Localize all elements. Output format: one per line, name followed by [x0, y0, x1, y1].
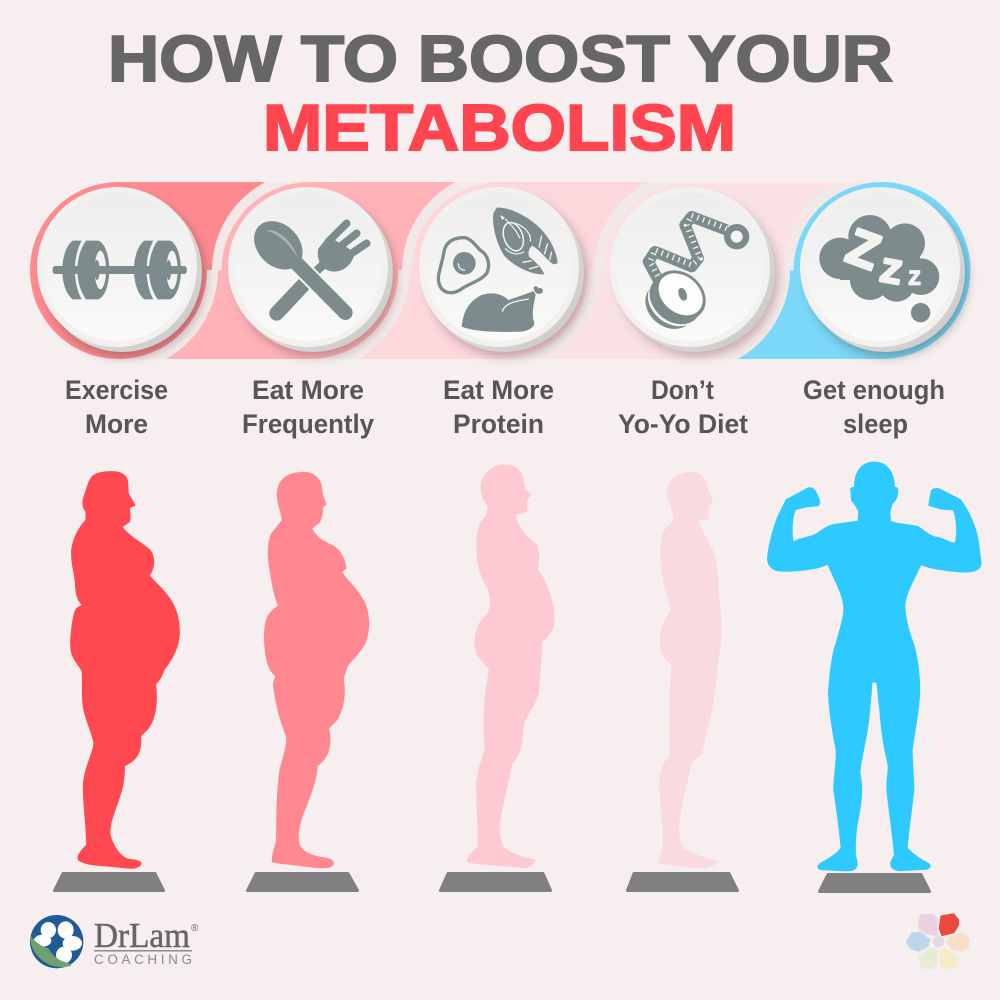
- title: HOW TO BOOST YOUR: [108, 22, 893, 95]
- figure: slimmer silhouette: [467, 465, 554, 867]
- button: sleep: [800, 187, 968, 357]
- step labels: Yo-Yo Diet: [618, 409, 748, 439]
- step labels: Protein: [453, 409, 544, 439]
- title: [108, 22, 893, 164]
- button: measuring tape: [610, 187, 778, 357]
- logo wordmark: COACHING: [94, 952, 192, 967]
- icon: barbell: [53, 241, 187, 299]
- figure: slim silhouette: [658, 472, 721, 868]
- ribbon band behind the icons: [30, 182, 970, 359]
- step labels: Exercise: [65, 375, 168, 405]
- step labels: Don’t: [651, 375, 714, 405]
- icon: spoon and fork: [244, 211, 367, 313]
- step labels: Get enough: [803, 375, 945, 405]
- figure: muscular silhouette: [768, 463, 981, 870]
- button: protein: [419, 187, 587, 357]
- icon: sleep cloud: [819, 215, 939, 322]
- button: exercise: [37, 187, 205, 357]
- logo mark: [30, 915, 83, 968]
- logo wordmark: DrLam: [94, 916, 190, 955]
- step labels: More: [85, 409, 148, 439]
- icon: sleep cloud: Z: [840, 218, 887, 281]
- icon: egg, salmon and chicken: [438, 208, 558, 332]
- step labels: Eat More: [252, 375, 364, 405]
- icon: sleep cloud: Z: [878, 251, 904, 291]
- button: spoon and fork: [228, 187, 396, 357]
- step labels: Eat More: [443, 375, 554, 405]
- figure: overweight silhouette: [264, 472, 369, 868]
- logo: DrLam Coaching: [30, 915, 199, 968]
- icon: sleep cloud: Z: [909, 268, 921, 289]
- title: METABOLISM: [263, 91, 736, 164]
- icon: coloured flower: [907, 915, 969, 969]
- step labels: [65, 375, 945, 439]
- step labels: Frequently: [242, 409, 374, 439]
- icon: measuring tape: [636, 215, 746, 339]
- step labels: sleep: [843, 409, 908, 439]
- figure: obese silhouette: [71, 472, 179, 868]
- logo wordmark: ®: [191, 923, 199, 934]
- scales under the figures: [54, 874, 930, 892]
